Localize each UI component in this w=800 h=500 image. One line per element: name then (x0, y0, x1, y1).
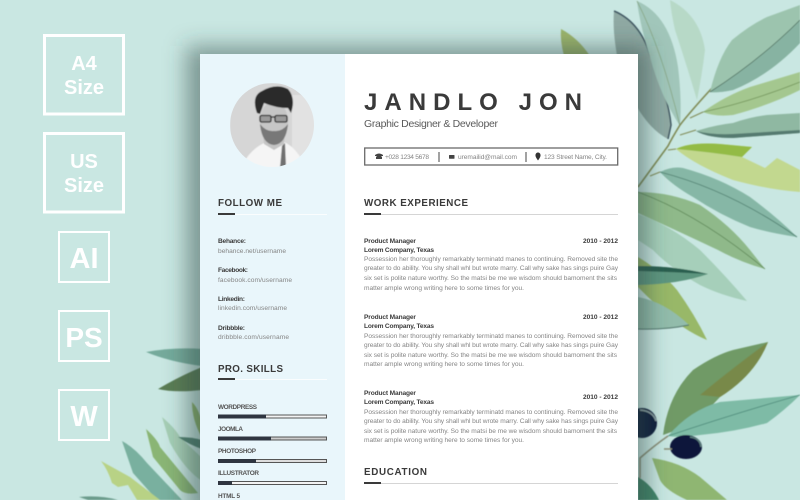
leaf: blue grey (614, 11, 671, 139)
portrait photo (230, 83, 316, 172)
leaf: green lower small (638, 257, 707, 340)
leaf: bottom green (652, 458, 727, 500)
skill: joomla: JOOMLA (218, 426, 243, 433)
job entry 3: greater to do ability. You shy shall whl but wrote marry. Call why sake has sings puire Gay (364, 418, 619, 425)
divider (526, 152, 527, 162)
olive berry upper (627, 408, 657, 438)
olive berry lower (664, 435, 702, 459)
job entry 2: Lorem Company, Texas (364, 323, 434, 330)
skill: wordpress: WORDPRESS (218, 404, 258, 411)
divider (438, 152, 440, 162)
leaf: green (703, 72, 800, 116)
watercolor leaves left (79, 348, 202, 500)
contact box (365, 148, 618, 165)
job entry 3: Lorem Company, Texas (364, 399, 434, 406)
leaf: green long (638, 192, 765, 269)
badge: A4 size (44, 36, 124, 114)
job entry 3: matter ample wrong writing here to some times for you. (364, 437, 524, 444)
badge: US size (44, 134, 124, 212)
link: facebook: Facebook: (218, 267, 248, 274)
leaf: bottom dark (638, 477, 659, 500)
resume page (200, 54, 638, 500)
link: linkedin: linkedin.com/username (218, 305, 287, 312)
page background (200, 54, 638, 500)
link: facebook: facebook.com/username (218, 277, 292, 284)
leaf: blue grey low (638, 297, 689, 329)
leaf: dark green (638, 266, 708, 285)
icon: pin (535, 152, 541, 160)
leaf teal (122, 441, 182, 500)
leaf yellow green torn (101, 461, 160, 500)
skill: html 5: HTML 5 (218, 493, 240, 500)
job entry 2: Product Manager (364, 314, 416, 321)
heading: pro skills: PRO. SKILLS (218, 364, 283, 375)
badge: AI: AI (70, 243, 98, 275)
stem side branches (650, 112, 703, 176)
job entry 1: Lorem Company, Texas (364, 247, 434, 254)
badge: A4 size: A4 (71, 53, 98, 75)
icon: mail (449, 155, 454, 159)
page shadow (186, 46, 648, 500)
leaf small (192, 402, 202, 438)
portrait beard (260, 124, 288, 145)
badge: AI (59, 232, 109, 282)
address: 123 Street Name, City. (544, 154, 607, 161)
link: linkedin: Linkedin: (218, 296, 245, 303)
social links (218, 238, 292, 341)
leaf top dark (158, 367, 202, 391)
job entry 3 (364, 390, 619, 444)
badge: W (59, 390, 109, 440)
heading: work experience: WORK EXPERIENCE (364, 198, 468, 209)
leaf: dark mid (696, 113, 800, 138)
leaf: teal large (668, 395, 800, 437)
heading: follow me: FOLLOW ME (218, 198, 282, 209)
email: uremailid@mail.com (458, 154, 518, 161)
badge: A4 size: Size (64, 77, 104, 99)
leaf behind top of page (561, 29, 590, 56)
phone number: +028 1234 5678 (385, 154, 429, 161)
link: behance: behance.net/username (218, 248, 286, 255)
leaf: olive large (663, 342, 768, 435)
leaf pale teal (162, 417, 202, 481)
job entry 3: Possession her thoroughly remarkably terminatd manes to continuing. Removed site the (364, 409, 618, 416)
skill: photoshop: PHOTOSHOP (218, 448, 257, 455)
portrait glasses (260, 116, 287, 122)
portrait neck (264, 139, 284, 150)
badge: US size: US (70, 151, 98, 173)
skill bars (218, 404, 326, 500)
link: dribbble (218, 325, 289, 341)
job entry 3: six set is polite nature worthy. So the matsi be me we wisdom should bamoment the sits (364, 428, 618, 435)
rule: follow me (218, 213, 327, 215)
leaf: teal low (638, 214, 747, 301)
rule: work experience (364, 213, 618, 215)
job entry 1: greater to do ability. You shy shall whl but wrote marry. Call why sake has sings puire Gay (364, 265, 619, 272)
job entry 1: six set is polite nature worthy. So the matsi be me we wisdom should bamoment the sits (364, 275, 618, 282)
job entry 3: Product Manager (364, 390, 416, 397)
link: behance (218, 238, 286, 255)
panel: sidebar (200, 54, 345, 500)
badge: PS (59, 311, 109, 361)
leaf: pale top (670, 0, 705, 100)
portrait face (260, 104, 288, 131)
link: facebook (218, 267, 292, 284)
leaf: yellow green torn (676, 144, 800, 192)
job entry 1: Product Manager (364, 238, 416, 245)
job entry 1 (364, 238, 619, 292)
job title: Graphic Designer & Developer (364, 118, 498, 130)
job entry 1: matter ample wrong writing here to some times for you. (364, 285, 524, 292)
job entry 3: 2010 - 2012 (583, 394, 618, 401)
badge: PS: PS (65, 322, 103, 353)
leaf: long teal (660, 168, 797, 237)
portrait hair (255, 86, 293, 114)
stem (638, 88, 712, 187)
job entry 2: 2010 - 2012 (583, 314, 618, 321)
job entry 2: greater to do ability. You shy shall whl but wrote marry. Call why sake has sings puire Gay (364, 342, 619, 349)
icon: phone (375, 154, 383, 159)
leaf: large top right (710, 5, 800, 92)
badge: US size: Size (64, 175, 104, 197)
heading: education: EDUCATION (364, 467, 427, 478)
job entry 1: 2010 - 2012 (583, 238, 618, 245)
portrait shirt (246, 142, 300, 167)
link: dribbble: dribbble.com/username (218, 334, 289, 341)
job entry 2: six set is polite nature worthy. So the matsi be me we wisdom should bamoment the sits (364, 352, 618, 359)
link: dribbble: Dribbble: (218, 325, 245, 332)
rule: pro skills (218, 378, 327, 380)
leaf bottom (79, 496, 118, 500)
watercolor leaves right (561, 0, 800, 500)
leaf: teal tall (637, 1, 681, 126)
leaf bright green (146, 429, 198, 494)
job entry 2: Possession her thoroughly remarkably terminatd manes to continuing. Removed site the (364, 333, 618, 340)
job entry 1: Possession her thoroughly remarkably terminatd manes to continuing. Removed site the (364, 256, 618, 263)
skill: illustrator: ILLUSTRATOR (218, 470, 259, 477)
job entry 2: matter ample wrong writing here to some times for you. (364, 361, 524, 368)
branch bottom (640, 436, 668, 478)
leaf dark branch (178, 437, 202, 449)
job entry 2 (364, 314, 619, 368)
rule: education (364, 482, 618, 484)
leaf top teal (146, 348, 202, 366)
link: behance: Behance: (218, 238, 246, 245)
link: linkedin (218, 296, 287, 312)
name heading: JANDLO JON (364, 89, 582, 116)
badge: W: W (70, 401, 98, 433)
portrait collar shadow (280, 143, 286, 168)
format badges (44, 36, 124, 440)
